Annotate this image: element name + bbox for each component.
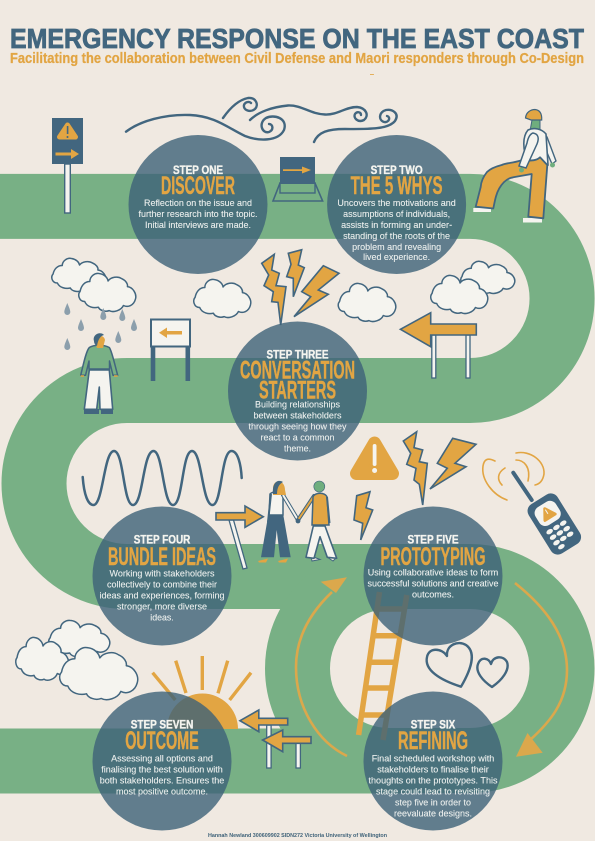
step six: thoughts on the prototypes. This (368, 776, 498, 786)
step four: stronger, more diverse (117, 602, 207, 612)
step three: Building relationships (255, 400, 340, 410)
icon: left arrow board sign (151, 320, 190, 381)
step six: Final scheduled workshop with (372, 754, 494, 764)
icon: double arrow signpost (240, 710, 311, 768)
icon: rain clouds (52, 258, 136, 312)
step five: STEP FIVE (408, 534, 459, 546)
step two: assumptions of individuals, (343, 209, 450, 219)
icon: wind swirls (126, 98, 397, 142)
step four: Working with stakeholders (110, 569, 215, 579)
step three: through seeing how they (248, 422, 347, 432)
step two: lived experience. (363, 252, 430, 262)
step five: PROTOTYPING (380, 543, 486, 571)
step six: reevaluate designs. (394, 808, 472, 818)
icon: sun (153, 656, 251, 729)
step three: between stakeholders (254, 411, 342, 421)
step four: STEP FOUR (134, 534, 191, 546)
step four: ideas and experiences, forming (100, 591, 224, 601)
icon: warning triangle (356, 443, 392, 474)
icon: cloud right of lightning (338, 283, 396, 322)
step seven: most positive outcome. (116, 786, 208, 796)
icon: two people holding hands (258, 481, 337, 562)
step seven (92, 692, 232, 830)
step one: Initial interviews are made. (145, 220, 251, 230)
step two: STEP TWO (371, 165, 423, 177)
step two: assists in forming an under- (341, 220, 452, 230)
step two (327, 135, 466, 274)
step seven: finalising the best solution with (101, 765, 223, 775)
step two: problem and revealing (352, 242, 441, 252)
footer credit: Hannah Newland 300609902 SIDN272 Victoria University of Wellington (208, 833, 387, 839)
icon: ring cycle arrow left (296, 577, 347, 756)
icon: signal waves (483, 453, 544, 500)
step six: stakeholders to finalise their (377, 765, 489, 775)
step six (364, 692, 502, 830)
icon: rain drops (64, 303, 137, 350)
step two: Uncovers the motivations and (337, 198, 456, 208)
step one: DISCOVER (161, 172, 235, 200)
step three: CONVERSATION (240, 357, 355, 385)
step six: stage could lead to revisiting (376, 786, 490, 796)
step two: standing of the roots of the (343, 231, 450, 241)
icon: person in rain (81, 333, 118, 414)
step four (92, 506, 232, 646)
step seven: both stakeholders. Ensures the (100, 776, 224, 786)
step three: react to a common (260, 433, 334, 443)
icon: emergency phone (513, 473, 584, 558)
step five: successful solutions and creative (368, 579, 498, 589)
step three: STEP THREE (266, 350, 329, 362)
icon: clouds lower left (16, 620, 138, 700)
icon: worker in hard hat (473, 110, 556, 222)
step three (228, 322, 367, 460)
step five: Using collaborative ideas to form (368, 568, 498, 578)
step six: STEP SIX (411, 719, 455, 731)
icon: sine wave (83, 451, 242, 505)
icon: folding sign with arrow (273, 157, 323, 201)
icon: ladder (359, 592, 407, 740)
icon: right arrow sign (216, 506, 263, 569)
step five (364, 506, 502, 646)
step two: THE 5 WHYS (351, 172, 443, 200)
step one: STEP ONE (173, 165, 223, 177)
icon: cloud left of lightning (194, 279, 251, 318)
step three: theme. (284, 444, 311, 454)
step five: outcomes. (412, 590, 454, 600)
icon: large left arrow sign (400, 313, 476, 378)
icon: ring cycle arrow right (515, 583, 567, 757)
step four: BUNDLE IDEAS (108, 543, 216, 571)
step six: step five in order to (395, 798, 471, 808)
step seven: Assessing all options and (111, 754, 213, 764)
step one: Reflection on the issue and (144, 198, 252, 208)
step three: STARTERS (259, 376, 336, 404)
step seven: STEP SEVEN (131, 719, 193, 731)
icon: lightning bolts above step five (354, 432, 476, 540)
green winding road (0, 206, 562, 761)
icon: warning sign with arrow (52, 118, 83, 213)
step six: REFINING (398, 727, 468, 755)
subtitle dash: – (370, 70, 375, 79)
step one (128, 135, 268, 274)
step one: further research into the topic. (138, 209, 258, 219)
icon: lightning bolts above step three (262, 250, 339, 325)
step four: ideas. (150, 612, 174, 622)
icon: hearts (427, 643, 508, 687)
step four: collectively to combine their (107, 580, 217, 590)
step seven: OUTCOME (125, 727, 199, 755)
icon: clouds on right (431, 261, 515, 314)
